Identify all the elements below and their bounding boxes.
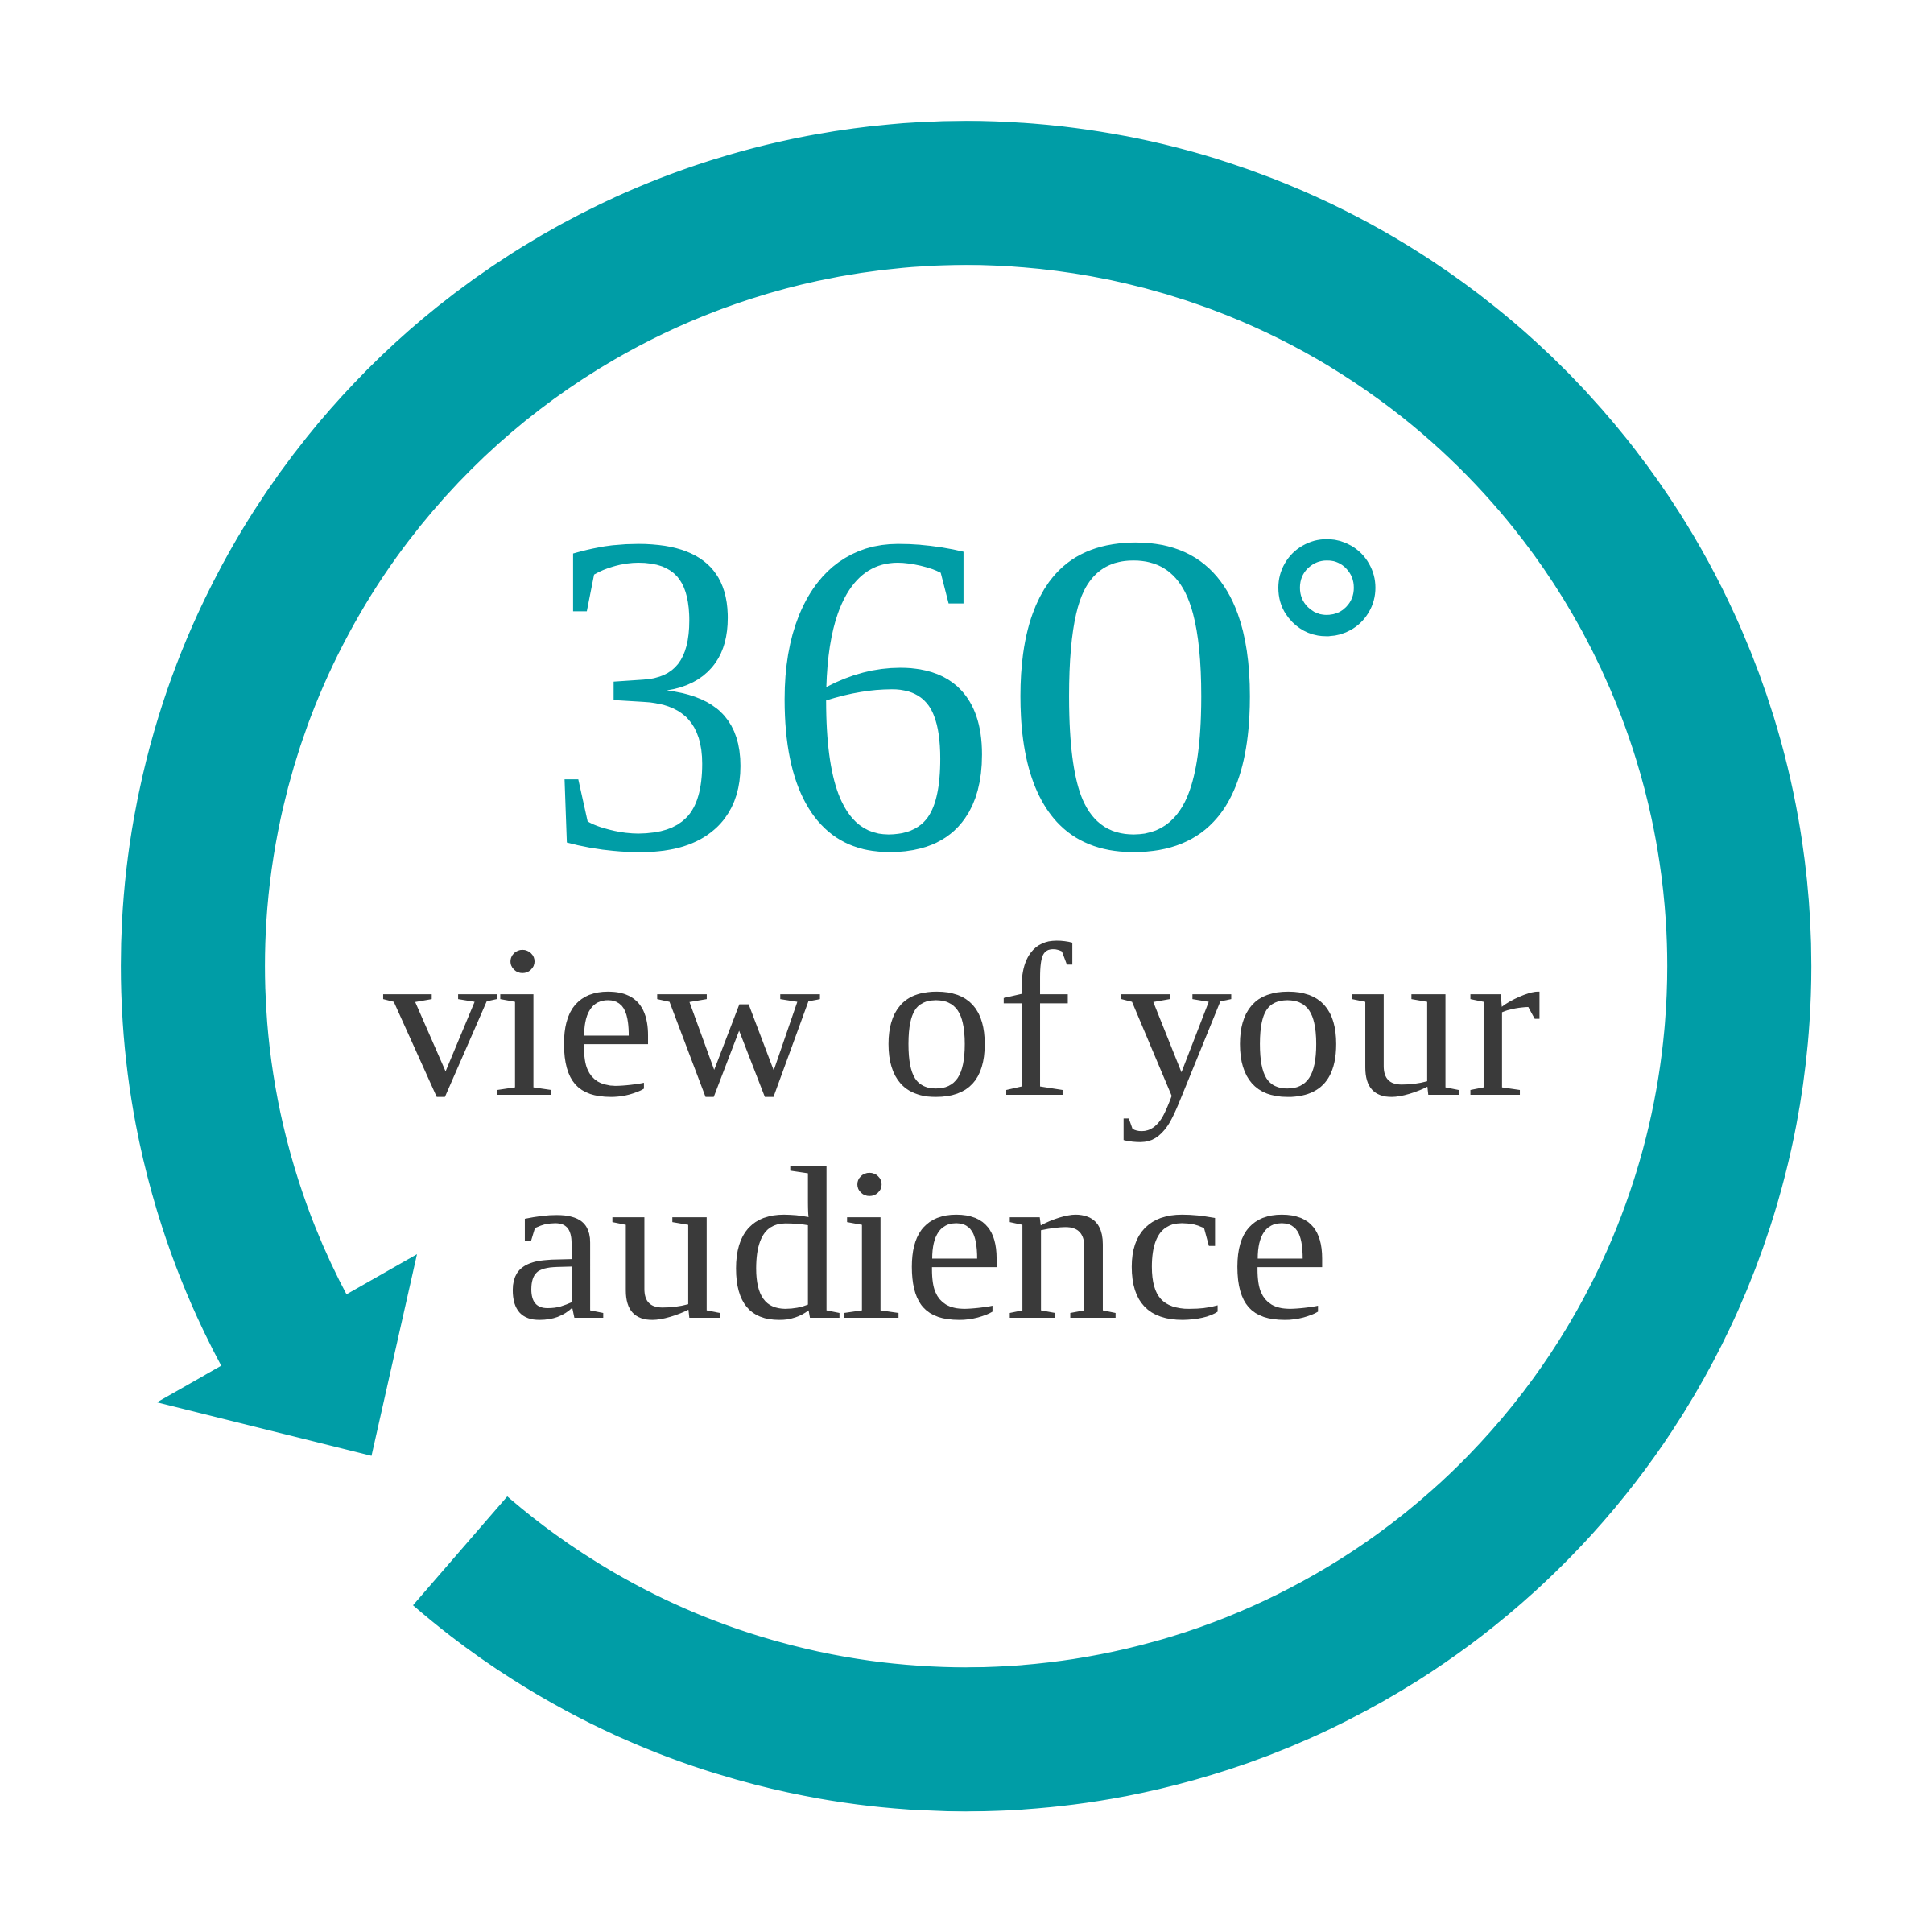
heading: 360 degrees: 0 [1000, 439, 1270, 947]
subheading: view of your audience: audience [505, 1124, 1330, 1366]
subheading: view of your audience [383, 900, 1542, 1366]
heading: 360 degrees: 3 [544, 439, 757, 947]
degree symbol: ° [1267, 476, 1386, 806]
subheading: view of your audience: view of your [383, 900, 1542, 1142]
heading: 360 degrees [544, 439, 1386, 947]
heading: 360 degrees: 6 [765, 439, 996, 947]
ring arc [193, 193, 1740, 1740]
arrow head [157, 1254, 417, 1455]
circular arrow [157, 193, 1740, 1740]
